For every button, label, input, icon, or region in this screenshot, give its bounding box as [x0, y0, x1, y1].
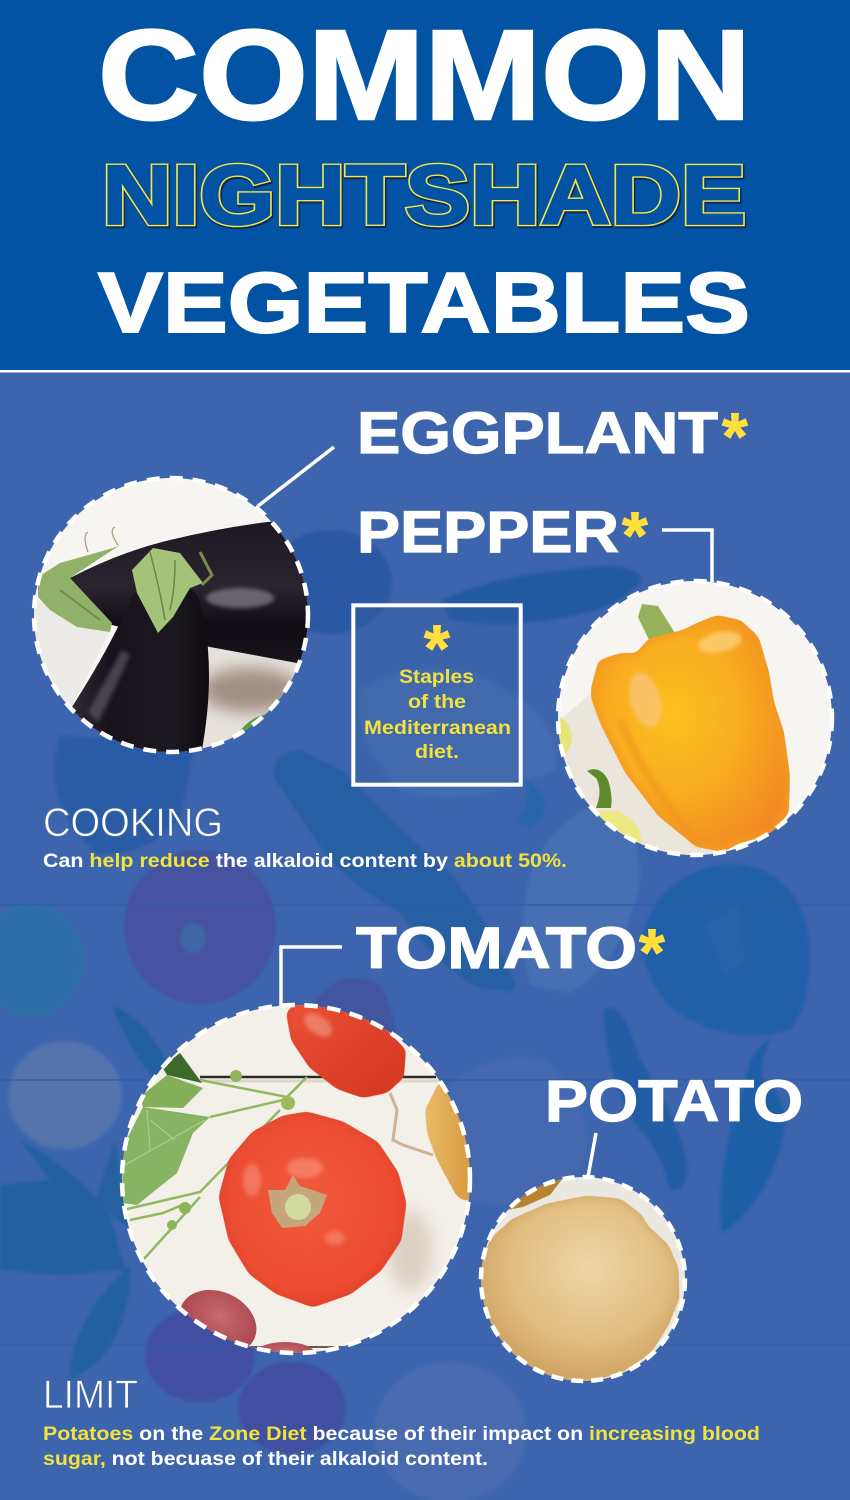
text block: cooking: [43, 801, 567, 872]
title: [98, 4, 751, 351]
photo: tomato: [120, 1000, 472, 1366]
title: NIGHTSHADE: [102, 148, 746, 242]
callout: mediterranean diet note: Staples: [399, 666, 474, 688]
title: NIGHTSHADE: [103, 150, 747, 244]
heading: eggplant: *: [722, 399, 748, 473]
heading: eggplant: EGGPLANT: [357, 401, 718, 466]
leader line: eggplant: [258, 447, 334, 506]
text block: limit: sugar, not becuase of their alkaloid content.: [43, 1448, 488, 1470]
title: VEGETABLES: [98, 256, 750, 351]
callout: mediterranean diet note: of the: [408, 691, 466, 713]
callout: mediterranean diet note: diet.: [415, 741, 459, 763]
leader line: tomato: [281, 947, 342, 1006]
callout: mediterranean diet note: [353, 605, 521, 785]
title: COMMON: [98, 4, 751, 147]
faded vegetable background: [0, 530, 850, 1500]
callout: mediterranean diet note: *: [424, 611, 450, 685]
heading: tomato: TOMATO: [356, 916, 637, 981]
title: NIGHTSHADE: [102, 148, 746, 242]
leader line: potato: [588, 1133, 596, 1177]
callout: mediterranean diet note: Mediterranean: [364, 717, 511, 739]
text block: cooking: Can help reduce the alkaloid content by about 50%.: [43, 850, 567, 872]
photo: eggplant: [30, 475, 320, 760]
lower background panel: [0, 372, 850, 1500]
heading: tomato: *: [639, 915, 665, 989]
photo: pepper: [555, 578, 835, 858]
photo: potato: [478, 1174, 688, 1384]
text block: cooking: COOKING: [43, 801, 223, 845]
text block: limit: [43, 1373, 760, 1470]
text block: limit: LIMIT: [43, 1373, 138, 1417]
text block: limit: Potatoes on the Zone Diet because of their impact on increasing blood: [43, 1423, 760, 1445]
header band: [0, 0, 850, 372]
heading: tomato: [356, 915, 665, 989]
heading: pepper: *: [622, 498, 648, 572]
heading: pepper: PEPPER: [357, 500, 619, 565]
heading: potato: POTATO: [545, 1069, 803, 1134]
leader line: pepper: [662, 530, 712, 582]
